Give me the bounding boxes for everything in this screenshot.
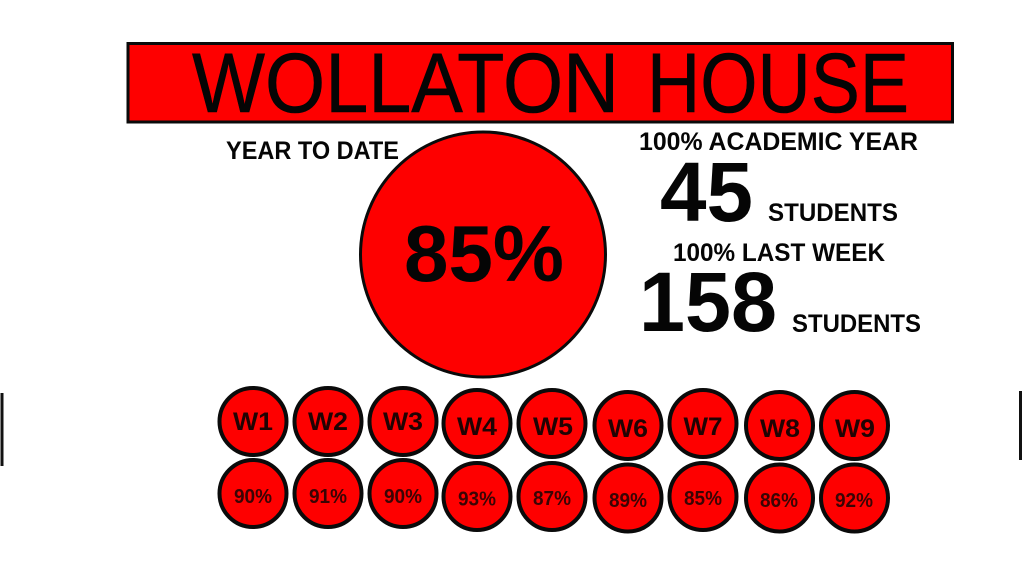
- year to date circle: 85%: [404, 209, 564, 298]
- W9: [821, 392, 888, 459]
- W3 value: [370, 460, 436, 527]
- title banner: HOUSE: [647, 36, 909, 130]
- W4 value: 93%: [458, 488, 496, 510]
- W3: W3: [383, 408, 423, 436]
- right edge mark: [1019, 391, 1022, 460]
- stat: 100% academic year: [639, 128, 918, 239]
- W1: W1: [233, 408, 273, 436]
- W1: [220, 388, 286, 455]
- W6 value: 89%: [609, 490, 647, 512]
- left edge mark: [0, 393, 4, 466]
- W5: W5: [533, 413, 573, 441]
- W7 value: [670, 463, 736, 530]
- title banner: WOLLATON: [192, 36, 619, 130]
- W6: [594, 392, 662, 459]
- W4: W4: [457, 413, 497, 441]
- weekly circles row: [220, 388, 888, 459]
- stat: 100% academic year: 100% ACADEMIC YEAR: [639, 128, 918, 156]
- W2 value: 91%: [309, 486, 347, 508]
- W9: W9: [835, 415, 875, 443]
- W3: [370, 388, 436, 455]
- stat: 100% last week: 100% LAST WEEK: [673, 239, 885, 267]
- title banner: [128, 36, 952, 130]
- W2 value: [294, 460, 362, 527]
- stat: 100% academic year: 45: [660, 145, 753, 239]
- W5 value: 87%: [533, 488, 571, 510]
- W9 value: 92%: [835, 490, 873, 512]
- stat: 100% last week: STUDENTS: [792, 310, 921, 338]
- W4: [444, 390, 510, 457]
- W8: [746, 392, 813, 459]
- W9 value: [821, 464, 888, 532]
- W8 value: 86%: [760, 490, 798, 512]
- W7: [670, 390, 736, 457]
- W7 value: 85%: [684, 488, 722, 510]
- year to date label: YEAR TO DATE: [226, 137, 399, 165]
- W4 value: [444, 463, 510, 530]
- stat: 100% academic year: STUDENTS: [768, 199, 898, 227]
- W6 value: [594, 464, 662, 532]
- W8 value: [746, 464, 813, 532]
- W3 value: 90%: [384, 486, 422, 508]
- weekly percentages row: [220, 460, 888, 532]
- W5: [518, 390, 586, 457]
- W6: W6: [608, 415, 648, 443]
- W2: [294, 388, 362, 455]
- stat: 100% last week: 158: [639, 255, 777, 349]
- W8: W8: [760, 415, 800, 443]
- W1 value: 90%: [234, 486, 272, 508]
- W5 value: [518, 463, 586, 530]
- W7: W7: [684, 413, 722, 441]
- W1 value: [220, 460, 286, 527]
- year to date circle: [360, 132, 606, 377]
- stat: 100% last week: [639, 239, 921, 349]
- W2: W2: [308, 408, 348, 436]
